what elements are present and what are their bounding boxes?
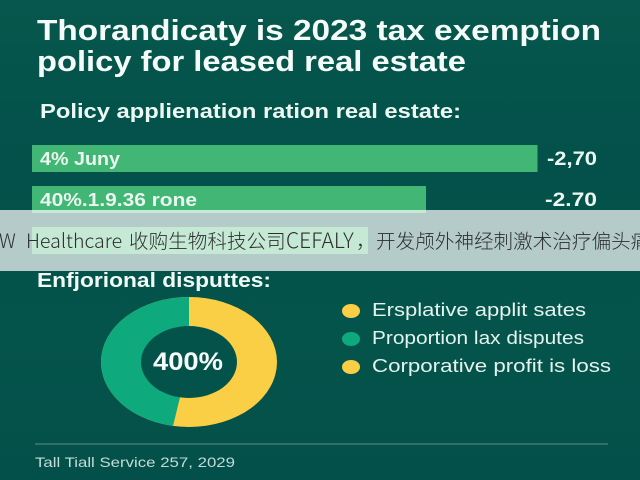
bar 2: -2.70 <box>545 190 597 211</box>
overlay caption text: ， <box>356 225 376 254</box>
legend item 3: Corporative profit is loss <box>372 355 611 376</box>
legend <box>342 299 611 376</box>
footer text: Tall Tiall Service 257, 2029 <box>35 454 235 470</box>
heading: disputes: Enfjorional disputtes: <box>37 270 271 292</box>
bar 1 <box>32 145 597 172</box>
title <box>37 15 601 78</box>
title: Thorandicaty is 2023 tax exemption <box>37 15 601 47</box>
overlay caption text: Healthcare <box>26 225 122 254</box>
donut hole <box>141 326 237 398</box>
legend item 2: Proportion lax disputes <box>372 327 584 348</box>
overlay caption band <box>0 210 640 271</box>
overlay caption text: 收购生物科技公司 <box>129 225 286 254</box>
heading: policy application: Policy applienation ration real estate: <box>40 101 461 123</box>
donut segment: yellow <box>101 297 277 427</box>
bar chart: policy application <box>32 145 597 254</box>
bar 1: -2,70 <box>547 149 597 170</box>
bar 2: 40%.1.9.36 rone <box>40 190 197 210</box>
title: policy for leased real estate <box>37 46 466 78</box>
overlay caption text: CEFALY <box>286 225 354 255</box>
donut centre value: 400% <box>153 348 223 376</box>
bar 2 <box>32 186 597 213</box>
legend item 1: Ersplative applit sates <box>372 299 586 320</box>
donut chart <box>101 297 277 427</box>
donut segment: green <box>101 297 189 426</box>
bar 3 <box>32 227 368 254</box>
bar 1: 4% Juny <box>40 149 120 169</box>
